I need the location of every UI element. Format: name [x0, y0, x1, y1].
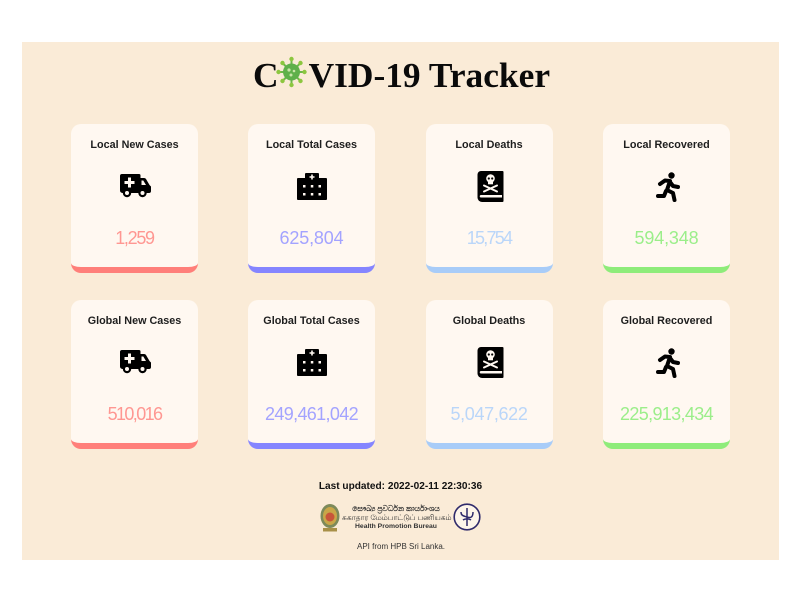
card: Global Deaths: Global Deaths: [453, 315, 525, 327]
icon: running person: [656, 172, 680, 202]
card: Local New Cases: [71, 124, 198, 273]
card: Local Deaths: [426, 124, 552, 273]
card: Global Deaths: 5,047,622: [450, 404, 528, 424]
card: Local Recovered: 594,348: [634, 228, 698, 248]
card: Local Recovered: [603, 124, 730, 273]
icon: hospital: [297, 173, 327, 200]
Health Promotion Bureau wordmark: Health Promotion Bureau: [355, 523, 437, 530]
Health Promotion Bureau wordmark: சுகாதார மேம்பாட்டுப் பணியகம்: [342, 513, 452, 522]
Health Promotion Bureau wordmark: [342, 504, 452, 530]
icon: hospital: [297, 349, 327, 376]
card: Local New Cases: Local New Cases: [90, 139, 179, 151]
card: Global New Cases: Global New Cases: [88, 315, 181, 327]
card: Local Total Cases: 625,804: [279, 228, 344, 248]
card: Local Deaths: 15,754: [467, 228, 511, 248]
icon: ambulance: [120, 174, 151, 198]
API source note: API from HPB Sri Lanka.: [357, 542, 445, 551]
card: Local Total Cases: Local Total Cases: [266, 139, 357, 151]
last updated text: Last updated: 2022-02-11 22:30:36: [319, 481, 482, 492]
card: Local New Cases: 1,259: [115, 228, 154, 248]
card: Global Total Cases: [248, 300, 375, 449]
card: Global Total Cases: Global Total Cases: [263, 315, 360, 327]
card: Global New Cases: 510,016: [108, 404, 161, 424]
card: Local Total Cases: [248, 124, 375, 273]
Health Promotion Bureau wordmark: සෞඛ්‍ය ප්‍රවර්ධන කාර්යාංශය: [352, 504, 440, 513]
icon: Sri Lanka emblem: [320, 504, 340, 532]
card: Global Total Cases: 249,461,042: [265, 404, 358, 424]
icon: poison book: [478, 347, 504, 378]
card: Local Deaths: Local Deaths: [455, 139, 523, 151]
card: Global Deaths: [426, 300, 552, 449]
icon: ambulance: [120, 350, 151, 374]
card: Global Recovered: 225,913,434: [620, 404, 713, 424]
icon: poison book: [478, 171, 504, 202]
icon: health ministry seal: [453, 503, 481, 531]
card: Global Recovered: [603, 300, 730, 449]
icon: running person: [656, 348, 680, 378]
card: Global New Cases: [71, 300, 198, 449]
card: Global Recovered: Global Recovered: [621, 315, 712, 327]
icon: green virus: [276, 56, 307, 88]
card: Local Recovered: Local Recovered: [623, 139, 710, 151]
title: C VID-19 Tracker: [253, 55, 550, 95]
